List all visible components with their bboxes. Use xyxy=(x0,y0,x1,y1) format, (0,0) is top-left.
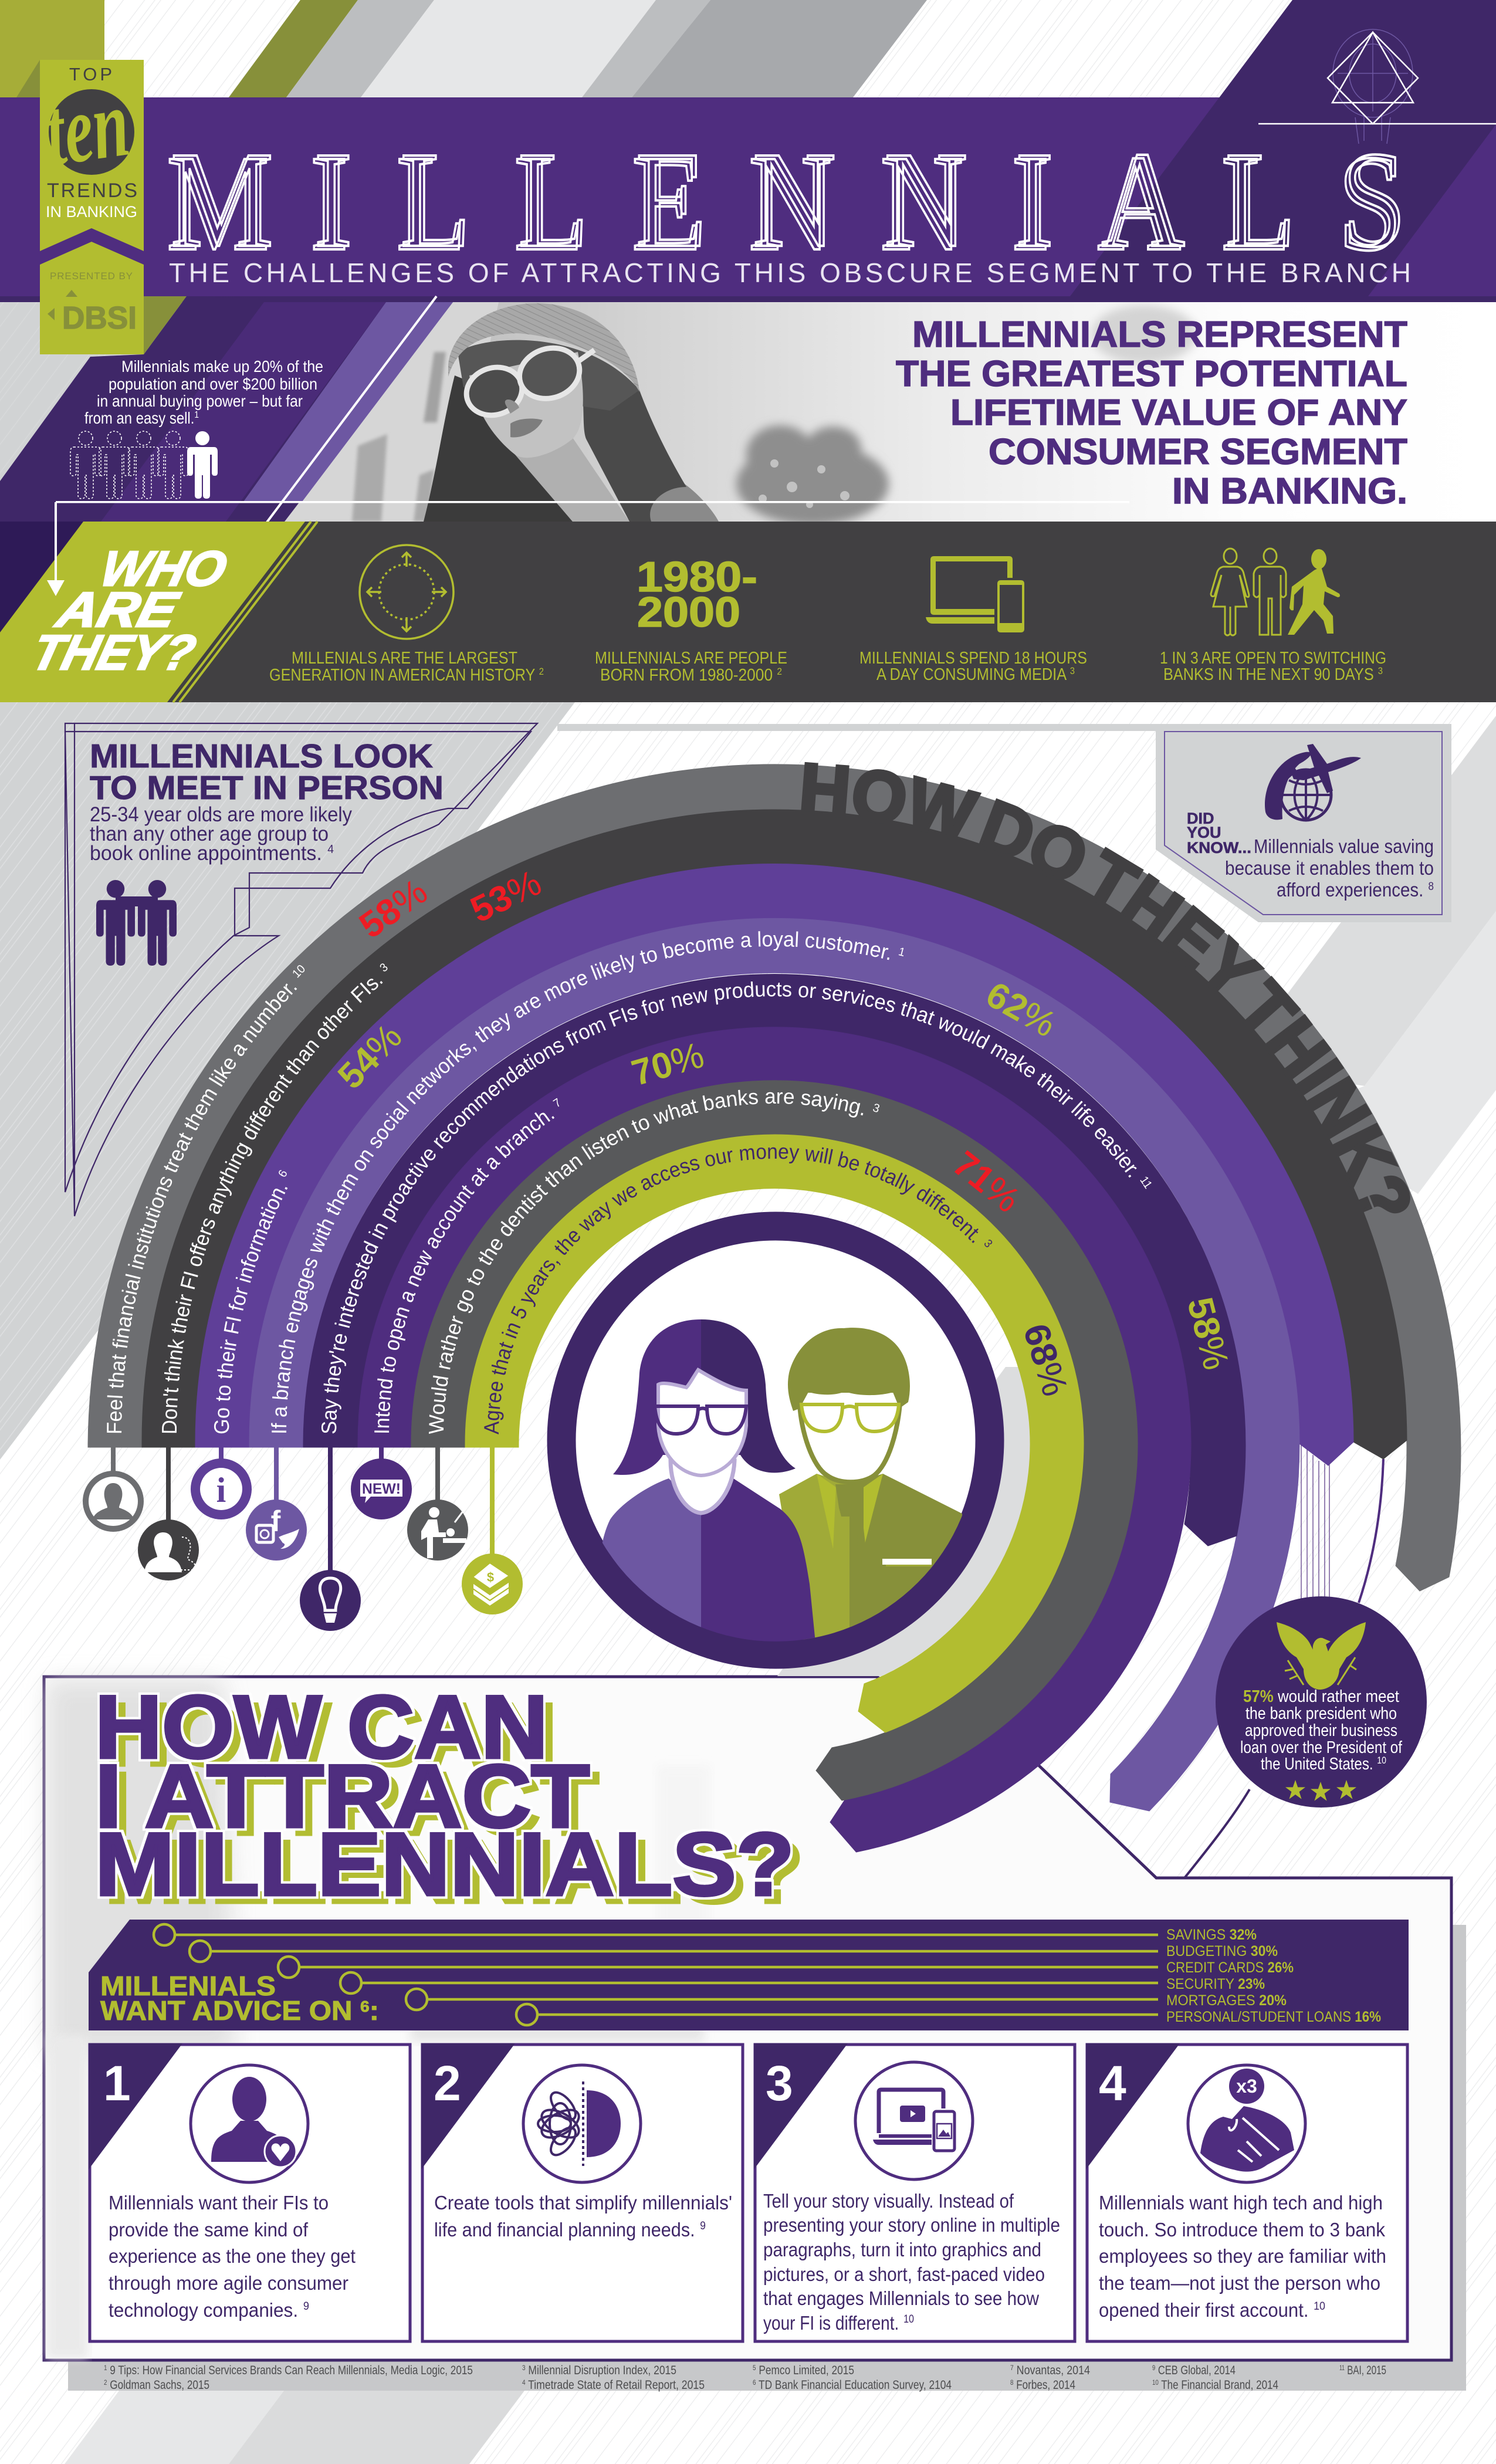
footnotes: 1 xyxy=(104,2364,107,2372)
card 2 xyxy=(421,2043,743,2341)
band 6 xyxy=(358,1027,1191,1852)
callout: did you know: 8 xyxy=(1429,881,1434,893)
card 3: that engages Millennials to see how xyxy=(763,2287,1039,2309)
band labels: 3 xyxy=(871,1101,881,1116)
icon: laptop and phone video xyxy=(855,2062,973,2179)
logo banner: Top Ten Trends in Banking: TRENDS xyxy=(47,180,137,202)
card 4: the team—not just the person who xyxy=(1099,2272,1380,2294)
advice bar: PERSONAL/STUDENT LOANS 16% xyxy=(1166,2009,1381,2025)
band labels: Feel that financial institutions treat them like a number. xyxy=(107,983,297,1433)
band labels: If a branch engages with them on social networks, they are more likely to become a loyal customer. xyxy=(267,927,895,1434)
footnotes: Goldman Sachs, 2015 xyxy=(107,2378,209,2392)
panel: millennials look to meet in person: TO MEET IN PERSON xyxy=(90,769,444,807)
advice bar: SAVINGS 32% xyxy=(1166,1927,1257,1943)
hero heading: LIFETIME VALUE OF ANY xyxy=(950,392,1407,433)
percentages: 54% xyxy=(330,1016,410,1096)
hero heading: IN BANKING. xyxy=(1172,471,1407,512)
hero heading: MILLENNIALS REPRESENT xyxy=(912,314,1407,355)
intro text: population and over $200 billion xyxy=(109,375,317,393)
card 3 xyxy=(754,2043,1075,2341)
footnotes xyxy=(104,2364,1386,2392)
icon: customer with heart xyxy=(191,2065,308,2182)
card 2: life and financial planning needs. xyxy=(434,2219,715,2240)
advice bar: MILLENIALS xyxy=(100,1971,276,2001)
logo banner: Top Ten Trends in Banking: DBSI xyxy=(62,300,137,336)
footnotes: BAI, 2015 xyxy=(1345,2364,1386,2377)
footnotes: 11 xyxy=(1339,2364,1345,2372)
intro text: 1 xyxy=(194,410,199,420)
card 1 xyxy=(89,2043,410,2341)
card 3: 3 xyxy=(766,2056,793,2111)
icon: dentist xyxy=(407,1447,468,1561)
card 1: through more agile consumer xyxy=(109,2272,348,2294)
logo banner: Top Ten Trends in Banking: ten xyxy=(39,69,135,186)
callout: did you know: KNOW... xyxy=(1187,839,1251,857)
logo banner: Top Ten Trends in Banking: IN BANKING xyxy=(46,203,137,221)
arrow: hero into who are they xyxy=(47,502,65,596)
portrait ring and millennial couple xyxy=(561,1226,990,1678)
card 4: opened their first account. xyxy=(1099,2299,1322,2321)
icon: handshake x3: x3 xyxy=(1236,2076,1257,2097)
footnotes: 8 xyxy=(1010,2378,1014,2387)
card 1: 9 xyxy=(303,2300,309,2313)
icon: person xyxy=(86,1447,141,1529)
panel: millennials look to meet in person: MILLENNIALS LOOK xyxy=(90,737,433,775)
icon: person and dashed person xyxy=(138,1447,199,1580)
icon: handshake x3 xyxy=(1188,2065,1305,2182)
advice bar: BUDGETING 30% xyxy=(1166,1943,1278,1959)
decorative emblem: falcon and triangles xyxy=(1258,29,1496,144)
band labels: 7 xyxy=(551,1096,563,1111)
footnotes: Forbes, 2014 xyxy=(1013,2378,1075,2392)
title xyxy=(95,1677,794,1914)
chart: advice lines xyxy=(154,1924,1158,2025)
icon: globe and plane xyxy=(1265,744,1361,820)
logo banner: Top Ten Trends in Banking xyxy=(16,60,144,354)
footnotes: 5 xyxy=(753,2364,756,2372)
decorative crescent xyxy=(777,1367,1030,1676)
footnotes: Novantas, 2014 xyxy=(1014,2364,1090,2377)
card 3: pictures, or a short, fast-paced video xyxy=(763,2263,1045,2285)
band 2 xyxy=(142,810,1407,1459)
title: HOW CAN xyxy=(95,1677,548,1777)
band labels: 6 xyxy=(276,1168,290,1179)
callout: did you know: because it enables them to xyxy=(1225,857,1434,879)
band labels: 10 xyxy=(293,965,305,978)
percentages: 58% xyxy=(352,871,435,946)
icon: money stack xyxy=(462,1447,523,1615)
subtitle and title xyxy=(169,123,1411,288)
callout: 57 percent eagle: the bank president who xyxy=(1245,1704,1397,1723)
hero heading: CONSUMER SEGMENT xyxy=(989,432,1407,472)
card 2: 2 xyxy=(434,2056,461,2111)
footnotes: 9 xyxy=(1152,2364,1156,2372)
callout: did you know: YOU xyxy=(1187,824,1221,841)
panel: millennials look to meet in person xyxy=(65,723,537,1216)
callout: 57 percent eagle xyxy=(1216,1596,1427,1808)
icon: two people xyxy=(96,880,177,966)
footnotes: Millennial Disruption Index, 2015 xyxy=(526,2364,676,2377)
footnotes: Timetrade State of Retail Report, 2015 xyxy=(526,2378,705,2392)
card 4: touch. So introduce them to 3 bank xyxy=(1099,2219,1385,2240)
card 2: Create tools that simplify millennials' xyxy=(434,2192,732,2213)
band labels: Say they're interested in proactive recommendations from FIs for new products or services that would make their life easier. xyxy=(317,977,1146,1434)
band labels: Intend to open a new account at a branch. xyxy=(370,1101,559,1434)
heading: who are they: WHO xyxy=(95,541,232,597)
card 4: 4 xyxy=(1099,2056,1126,2111)
callout: 57 percent eagle: 10 xyxy=(1377,1755,1386,1766)
icon: money stack: $ xyxy=(487,1570,494,1585)
advice bar: WANT ADVICE ON xyxy=(100,1995,336,2026)
card 1: technology companies. xyxy=(109,2299,307,2321)
panel: millennials look to meet in person: 25-34 year olds are more likely xyxy=(90,803,352,826)
intro text: in annual buying power – but far xyxy=(97,392,303,410)
intro text: Millennials make up 20% of the xyxy=(121,357,323,375)
advice bar: 6 xyxy=(360,1998,370,2015)
callout: did you know: Millennials value saving xyxy=(1254,835,1434,857)
stat: open to switching: 1 IN 3 ARE OPEN TO SWITCHING xyxy=(1160,649,1386,668)
title: I ATTRACT xyxy=(95,1747,590,1846)
band labels: 1 xyxy=(897,945,906,959)
panel outline xyxy=(65,723,537,1216)
logo banner: Top Ten Trends in Banking: TOP xyxy=(69,64,115,84)
icon: lightbulb xyxy=(300,1447,361,1631)
icon: three stars xyxy=(1285,1780,1356,1801)
band labels: 3 xyxy=(378,961,391,974)
stat: born 1980-2000: 2 xyxy=(777,666,782,677)
advice bar: MORTGAGES 20% xyxy=(1166,1992,1287,2009)
stat: open to switching: 3 xyxy=(1378,665,1383,676)
heading: how do they think: HOW DO THEY THINK? xyxy=(801,761,1410,1213)
heading: who are they xyxy=(26,541,232,681)
stat: media hours: A DAY CONSUMING MEDIA xyxy=(876,665,1094,684)
callout: 57 percent eagle: 57% would rather meet xyxy=(1243,1687,1399,1706)
advice bar: : xyxy=(370,1995,379,2026)
band labels: Would rather go to the dentist than listen to what banks are saying. xyxy=(424,1084,869,1434)
man xyxy=(779,1328,962,1640)
card 4 xyxy=(1086,2043,1407,2341)
footnotes: 4 xyxy=(522,2378,526,2387)
connector lines to eagle callout xyxy=(1301,1444,1383,1607)
hero photo of a woman in hat and sunglasses xyxy=(258,302,1496,525)
footnotes: 10 xyxy=(1152,2378,1159,2387)
band labels: 11 xyxy=(1137,1174,1155,1191)
callout: 57 percent eagle: the United States. xyxy=(1261,1755,1396,1773)
stat: born 1980-2000: MILLENNIALS ARE PEOPLE xyxy=(595,649,787,668)
percentages: 53% xyxy=(465,862,547,930)
card 4: 10 xyxy=(1314,2300,1325,2313)
stat: open to switching xyxy=(1160,549,1386,684)
callout: did you know xyxy=(557,724,1451,922)
card 3: Tell your story visually. Instead of xyxy=(763,2190,1014,2212)
icon: info xyxy=(191,1447,252,1519)
icon: info: i xyxy=(216,1471,226,1509)
card 1: provide the same kind of xyxy=(109,2219,309,2240)
panel: millennials look to meet in person: than any other age group to xyxy=(90,823,329,845)
callout: 57 percent eagle: loan over the President of xyxy=(1240,1738,1403,1757)
card 2: 9 xyxy=(700,2220,706,2232)
left purple panel xyxy=(0,296,1129,522)
footnotes: The Financial Brand, 2014 xyxy=(1159,2378,1278,2392)
card 3: your FI is different. xyxy=(763,2312,923,2334)
footnotes: 2 xyxy=(104,2378,107,2387)
subtitle: THE CHALLENGES OF ATTRACTING THIS OBSCURE SEGMENT TO THE BRANCH xyxy=(169,258,1411,288)
stem icons under arcs xyxy=(86,1447,523,1631)
logo banner: Top Ten Trends in Banking: PRESENTED BY xyxy=(50,270,133,282)
band 1 xyxy=(88,764,1461,1591)
percentages: 58% xyxy=(1179,1294,1237,1374)
footnotes: 6 xyxy=(753,2378,756,2387)
card 1: experience as the one they get xyxy=(109,2245,356,2267)
stat: largest generation: GENERATION IN AMERICAN HISTORY xyxy=(269,666,576,685)
icon: new speech bubble xyxy=(351,1447,412,1519)
footnotes: TD Bank Financial Education Survey, 2104 xyxy=(756,2378,952,2392)
stat: largest generation xyxy=(269,545,544,685)
card 3: presenting your story online in multiple xyxy=(763,2214,1060,2236)
percentages: 68% xyxy=(1016,1319,1075,1401)
stat: media hours xyxy=(859,556,1087,684)
stat: born 1980-2000: 2000 xyxy=(637,589,740,636)
band 8 xyxy=(465,1135,1084,1732)
heading: who are they: ARE xyxy=(50,583,184,638)
band labels: 3 xyxy=(981,1237,995,1250)
card 1: 1 xyxy=(103,2056,131,2111)
advice bar: SECURITY 23% xyxy=(1166,1976,1265,1992)
footnotes: 9 Tips: How Financial Services Brands Can Reach Millennials, Media Logic, 2015 xyxy=(107,2364,473,2377)
panel: how can I attract millennials xyxy=(44,1677,1466,2392)
percentages: 71% xyxy=(945,1143,1027,1221)
percentages: 70% xyxy=(627,1035,708,1094)
band labels: Agree that in 5 years, the way we access our money will be totally different. xyxy=(479,1139,989,1434)
card 1: Millennials want their FIs to xyxy=(109,2192,329,2213)
footnotes: 3 xyxy=(522,2364,526,2372)
band 5 xyxy=(303,974,1245,1546)
hero heading: THE GREATEST POTENTIAL xyxy=(896,354,1407,394)
percentages: 62% xyxy=(979,974,1062,1045)
card 3: 10 xyxy=(903,2313,914,2326)
advice bar: CREDIT CARDS 26% xyxy=(1166,1959,1294,1976)
woman xyxy=(602,1319,815,1641)
footnotes: CEB Global, 2014 xyxy=(1155,2364,1236,2377)
footnotes: 7 xyxy=(1010,2364,1014,2372)
stat: media hours: MILLENNIALS SPEND 18 HOURS xyxy=(859,649,1087,668)
stat: media hours: 3 xyxy=(1070,665,1075,676)
icon: new speech bubble: NEW! xyxy=(362,1481,401,1497)
stat: largest generation: 2 xyxy=(539,666,544,677)
band labels: Don't think their FI offers anything different than other FIs. xyxy=(157,967,387,1434)
footnotes: Pemco Limited, 2015 xyxy=(756,2364,854,2377)
chart: concentric arc bands: how do they think xyxy=(88,761,1461,1853)
stat: open to switching: BANKS IN THE NEXT 90 DAYS xyxy=(1163,665,1404,684)
title: MILLENNIALS: MILLENNIALS xyxy=(171,123,1406,276)
callout: 57 percent eagle: approved their business xyxy=(1245,1721,1397,1740)
panel: millennials look to meet in person: 4 xyxy=(327,843,334,856)
ghost photo xyxy=(47,1680,710,2358)
who are they band xyxy=(0,502,1496,702)
band 3 xyxy=(195,864,1353,1465)
stat: born 1980-2000: BORN FROM 1980-2000 xyxy=(600,666,790,685)
stat: born 1980-2000: 1980- xyxy=(637,554,757,601)
card 3: paragraphs, turn it into graphics and xyxy=(763,2239,1041,2260)
icon: one in five people xyxy=(70,431,218,499)
card 4: Millennials want high tech and high xyxy=(1099,2192,1383,2213)
icon: social networks xyxy=(246,1447,307,1561)
card 4: employees so they are familiar with xyxy=(1099,2245,1386,2267)
percentages xyxy=(330,862,1237,1401)
callout: did you know: afford experiences. xyxy=(1277,879,1441,901)
callout: did you know: DID xyxy=(1187,810,1214,827)
band 7 xyxy=(411,1081,1138,1800)
band labels: Go to their FI for information. xyxy=(209,1177,293,1434)
intro text xyxy=(84,357,323,427)
stat: born 1980-2000 xyxy=(595,554,787,685)
advice bar xyxy=(89,1920,1409,2030)
hero heading xyxy=(896,314,1407,512)
title: MILLENNIALS? xyxy=(95,1815,794,1914)
header band xyxy=(0,0,1496,302)
icon: eagle xyxy=(1277,1622,1366,1690)
panel: millennials look to meet in person: book online appointments. xyxy=(90,842,330,865)
heading: who are they: THEY? xyxy=(26,625,201,681)
stat: largest generation: MILLENIALS ARE THE LARGEST xyxy=(292,649,517,668)
intro text: from an easy sell. xyxy=(84,409,213,427)
icon: half brain half solid xyxy=(523,2065,641,2182)
icon: social networks: f xyxy=(271,1505,281,1538)
band 4 xyxy=(249,918,1299,1811)
